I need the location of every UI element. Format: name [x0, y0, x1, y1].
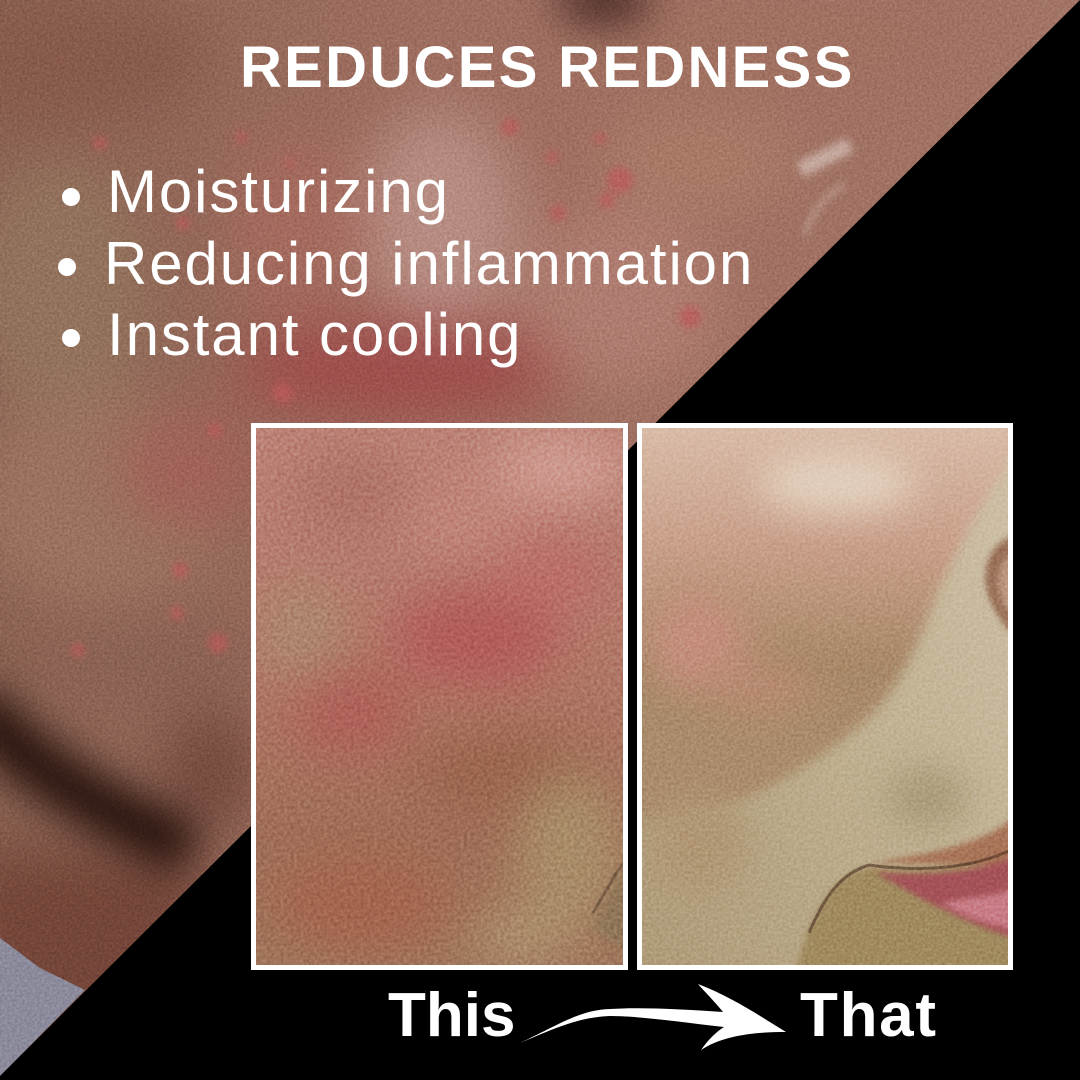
mouth shadow: [797, 851, 1013, 970]
after photo panel: [637, 423, 1013, 970]
glare on skin: [800, 145, 850, 235]
collar: [0, 938, 85, 1076]
before photo panel: [251, 423, 628, 970]
label: This: This: [388, 981, 515, 1050]
title: REDUCES REDNESS: [240, 35, 855, 100]
cheek: [617, 403, 1032, 823]
bullet: Instant cooling: Instant cooling: [107, 301, 522, 368]
bullet: Reducing inflammation: Reducing inflammation: [104, 230, 754, 297]
jaw shadow: [0, 700, 190, 850]
label: That: That: [800, 981, 938, 1050]
bullet: Moisturizing: Moisturizing: [107, 158, 450, 225]
nostril shadow: [556, 0, 652, 26]
bullet list: [58, 158, 754, 368]
nose wing: [985, 535, 1013, 635]
